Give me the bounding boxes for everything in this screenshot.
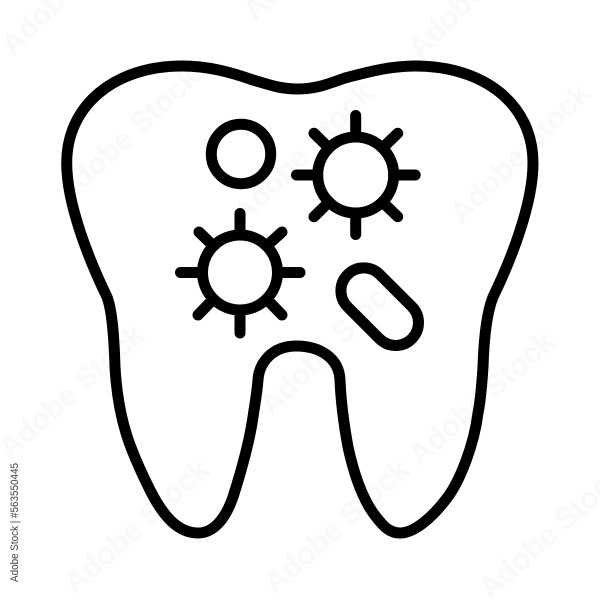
watermark pattern: Adobe Stock [49,61,206,210]
watermark pattern: Adobe Stock [444,77,597,230]
watermark pattern: Adobe Stock [227,77,380,230]
watermark pattern: Adobe Stock [254,269,407,422]
round germ [211,124,271,184]
watermark pattern: Adobe Stock [258,453,416,600]
virus: upper right [296,116,415,234]
virus: lower left [180,214,300,333]
watermark pattern: Adobe Stock [58,453,216,600]
watermark pattern: Adobe Stock [403,325,561,472]
pill-shaped bacterium [331,258,428,355]
tooth outline [67,66,533,533]
stock image credit: Adobe Stock | #563550445 [9,463,21,582]
